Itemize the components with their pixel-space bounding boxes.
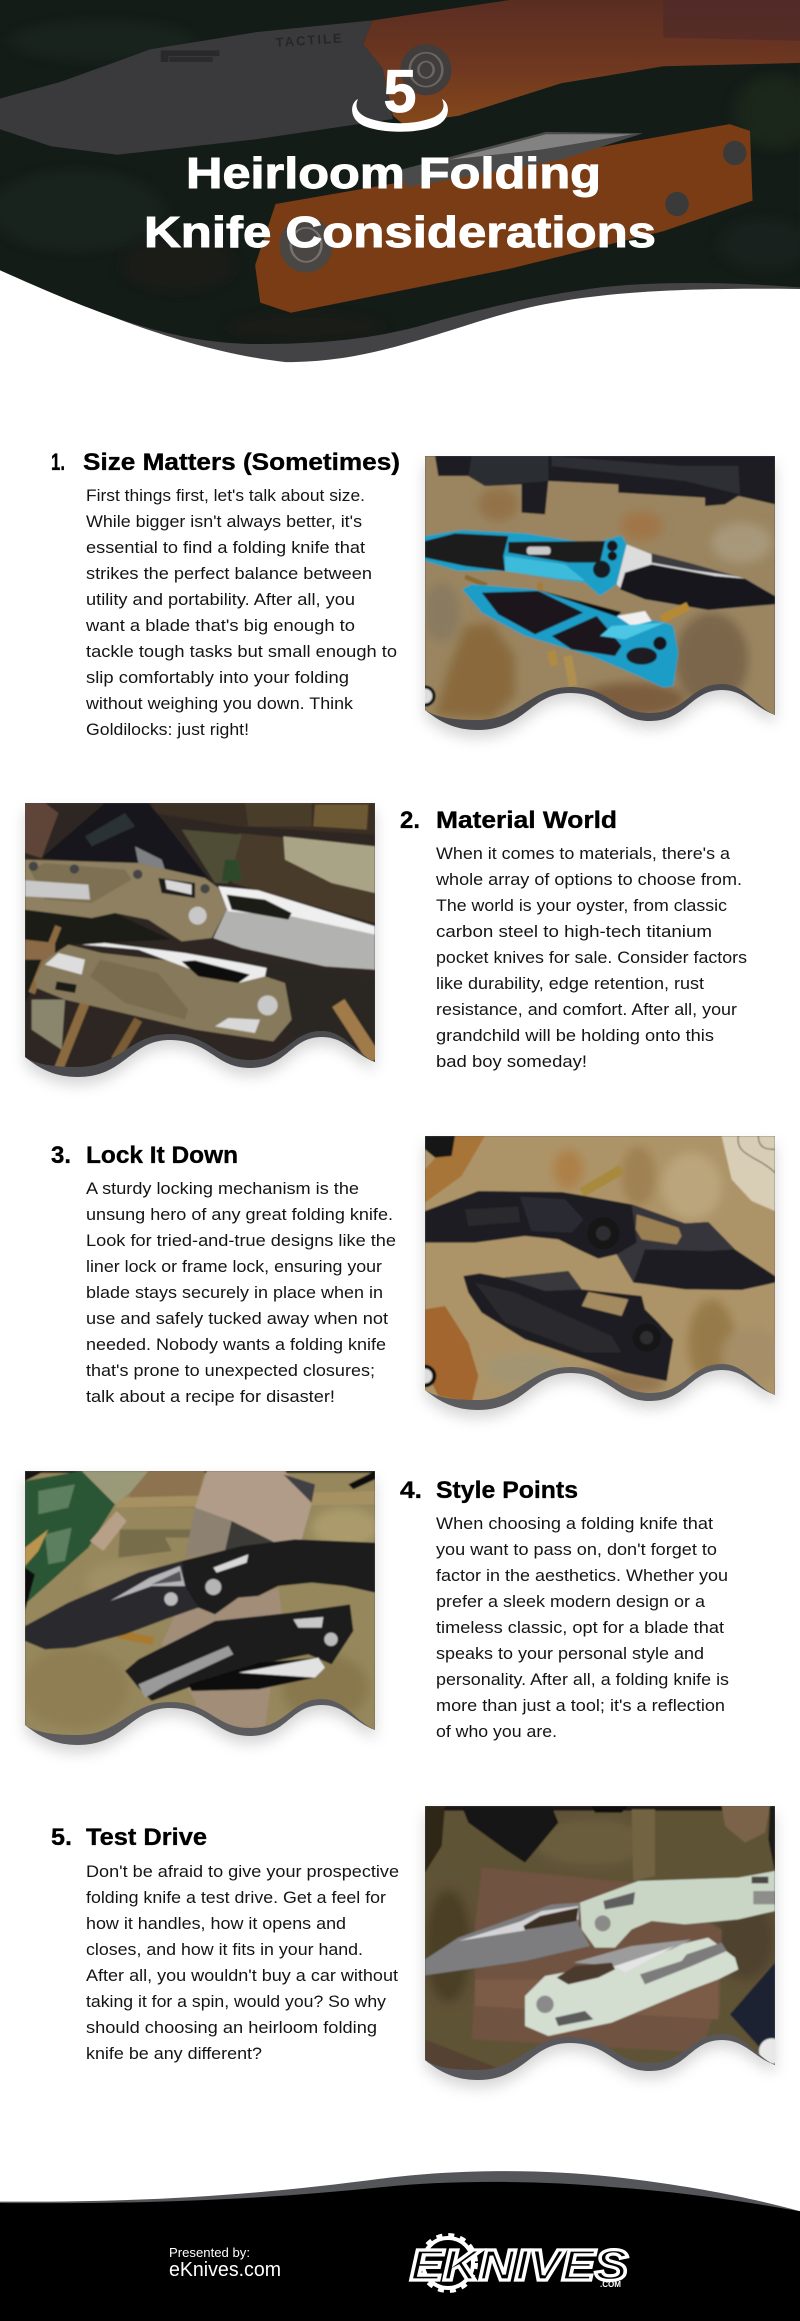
presented by text: Presented by: bbox=[169, 2245, 250, 2260]
body text 1: slip comfortably into your folding bbox=[86, 668, 349, 687]
panel 3: lock it down text bbox=[51, 1142, 396, 1406]
body text 4: timeless classic, opt for a blade that bbox=[436, 1618, 724, 1637]
body text 1: Goldilocks: just right! bbox=[86, 720, 249, 739]
logo: eKnives: EKNIVES bbox=[410, 2241, 628, 2290]
photo 3: black knives on canvas bbox=[414, 1136, 782, 1410]
body text 3: A sturdy locking mechanism is the bbox=[86, 1179, 359, 1198]
heading 5: 5. bbox=[51, 1824, 72, 1851]
body text 1 bbox=[85, 486, 397, 739]
body text 4: you want to pass on, don't forget to bbox=[436, 1540, 717, 1559]
body text 5: After all, you wouldn't buy a car without bbox=[86, 1966, 398, 1985]
body text 3: liner lock or frame lock, ensuring your bbox=[86, 1257, 382, 1276]
photo 2: tan knives bbox=[25, 803, 375, 1077]
body text 3: use and safely tucked away when not bbox=[86, 1309, 388, 1328]
photo 1: teal knives bbox=[414, 456, 775, 730]
title: Heirloom Folding bbox=[186, 149, 601, 198]
header wave edge bbox=[0, 238, 800, 362]
body text 5: how it handles, how it opens and bbox=[86, 1914, 346, 1933]
body text 3: that's prone to unexpected closures; bbox=[86, 1361, 375, 1380]
body text 1: essential to find a folding knife that bbox=[86, 538, 365, 557]
body text 2: The world is your oyster, from classic bbox=[436, 896, 728, 915]
photo 5: pale green knives on wood bbox=[425, 1806, 784, 2080]
body text 2: resistance, and comfort. After all, your bbox=[436, 1000, 737, 1019]
body text 5: Don't be afraid to give your prospective bbox=[86, 1862, 399, 1881]
presented by text: eKnives.com bbox=[169, 2259, 281, 2281]
heading 3: 3. bbox=[51, 1142, 71, 1169]
body text 3: needed. Nobody wants a folding knife bbox=[86, 1335, 386, 1354]
body text 2: whole array of options to choose from. bbox=[435, 870, 742, 889]
body text 1: tackle tough tasks but small enough to bbox=[86, 642, 397, 661]
body text 4: When choosing a folding knife that bbox=[436, 1514, 713, 1533]
body text 5 bbox=[86, 1862, 399, 2063]
body text 4: of who you are. bbox=[436, 1722, 557, 1741]
body text 1: want a blade that's big enough to bbox=[85, 616, 355, 635]
body text 5: should choosing an heirloom folding bbox=[86, 2018, 377, 2037]
body text 2: When it comes to materials, there's a bbox=[436, 844, 731, 863]
number badge: 5 with ring: 5 bbox=[384, 58, 416, 125]
heading 5: Test Drive bbox=[86, 1824, 207, 1851]
heading 2: 2. bbox=[400, 807, 420, 834]
photo 4: black knives with magazine bbox=[22, 1471, 378, 1745]
body text 3: talk about a recipe for disaster! bbox=[86, 1387, 335, 1406]
body text 5: closes, and how it fits in your hand. bbox=[86, 1940, 363, 1959]
body text 3 bbox=[86, 1179, 396, 1406]
header banner bbox=[0, 0, 800, 374]
body text 2: bad boy someday! bbox=[436, 1052, 587, 1071]
logo: eKnives: .COM bbox=[600, 2280, 621, 2289]
body text 2: like durability, edge retention, rust bbox=[436, 974, 704, 993]
body text 1: While bigger isn't always better, it's bbox=[86, 512, 362, 531]
stamp on blade: TACTILE bbox=[275, 30, 344, 50]
heading 1: Size Matters (Sometimes) bbox=[83, 449, 400, 476]
body text 3: blade stays securely in place when in bbox=[86, 1283, 383, 1302]
panel 5: test drive text bbox=[51, 1824, 399, 2063]
body text 2 bbox=[435, 844, 747, 1071]
body text 4: prefer a sleek modern design or a bbox=[436, 1592, 706, 1611]
body text 4 bbox=[436, 1514, 729, 1741]
number badge: 5 with ring bbox=[352, 58, 448, 132]
footer band bbox=[0, 2171, 800, 2321]
title: Knife Considerations bbox=[144, 208, 656, 257]
body text 4: factor in the aesthetics. Whether you bbox=[436, 1566, 728, 1585]
heading 3: Lock It Down bbox=[86, 1142, 238, 1169]
panel 4: style points text bbox=[400, 1477, 729, 1741]
presented by text bbox=[169, 2245, 281, 2281]
body text 3: unsung hero of any great folding knife. bbox=[86, 1205, 393, 1224]
heading 4: 4. bbox=[400, 1477, 422, 1504]
body text 5: folding knife a test drive. Get a feel for bbox=[86, 1888, 386, 1907]
body text 4: speaks to your personal style and bbox=[436, 1644, 704, 1663]
panel 1: size matters text bbox=[51, 449, 400, 739]
body text 4: personality. After all, a folding knife is bbox=[436, 1670, 729, 1689]
body text 2: pocket knives for sale. Consider factors bbox=[436, 948, 747, 967]
body text 1: First things first, let's talk about size. bbox=[86, 486, 365, 505]
body text 3: Look for tried-and-true designs like the bbox=[86, 1231, 396, 1250]
body text 2: carbon steel to high-tech titanium bbox=[436, 922, 712, 941]
body text 5: taking it for a spin, would you? So why bbox=[86, 1992, 387, 2011]
body text 1: strikes the perfect balance between bbox=[86, 564, 372, 583]
heading 1: 1. bbox=[51, 449, 65, 476]
body text 5: knife be any different? bbox=[86, 2044, 262, 2063]
header photo: two knives bbox=[0, 0, 800, 374]
body text 2: grandchild will be holding onto this bbox=[436, 1026, 714, 1045]
body text 1: utility and portability. After all, you bbox=[86, 590, 355, 609]
body text 4: more than just a tool; it's a reflection bbox=[436, 1696, 725, 1715]
body text 1: without weighing you down. Think bbox=[85, 694, 354, 713]
heading 2: Material World bbox=[436, 807, 617, 834]
title bbox=[144, 149, 656, 257]
heading 4: Style Points bbox=[436, 1477, 578, 1504]
panel 2: material world text bbox=[400, 807, 747, 1071]
